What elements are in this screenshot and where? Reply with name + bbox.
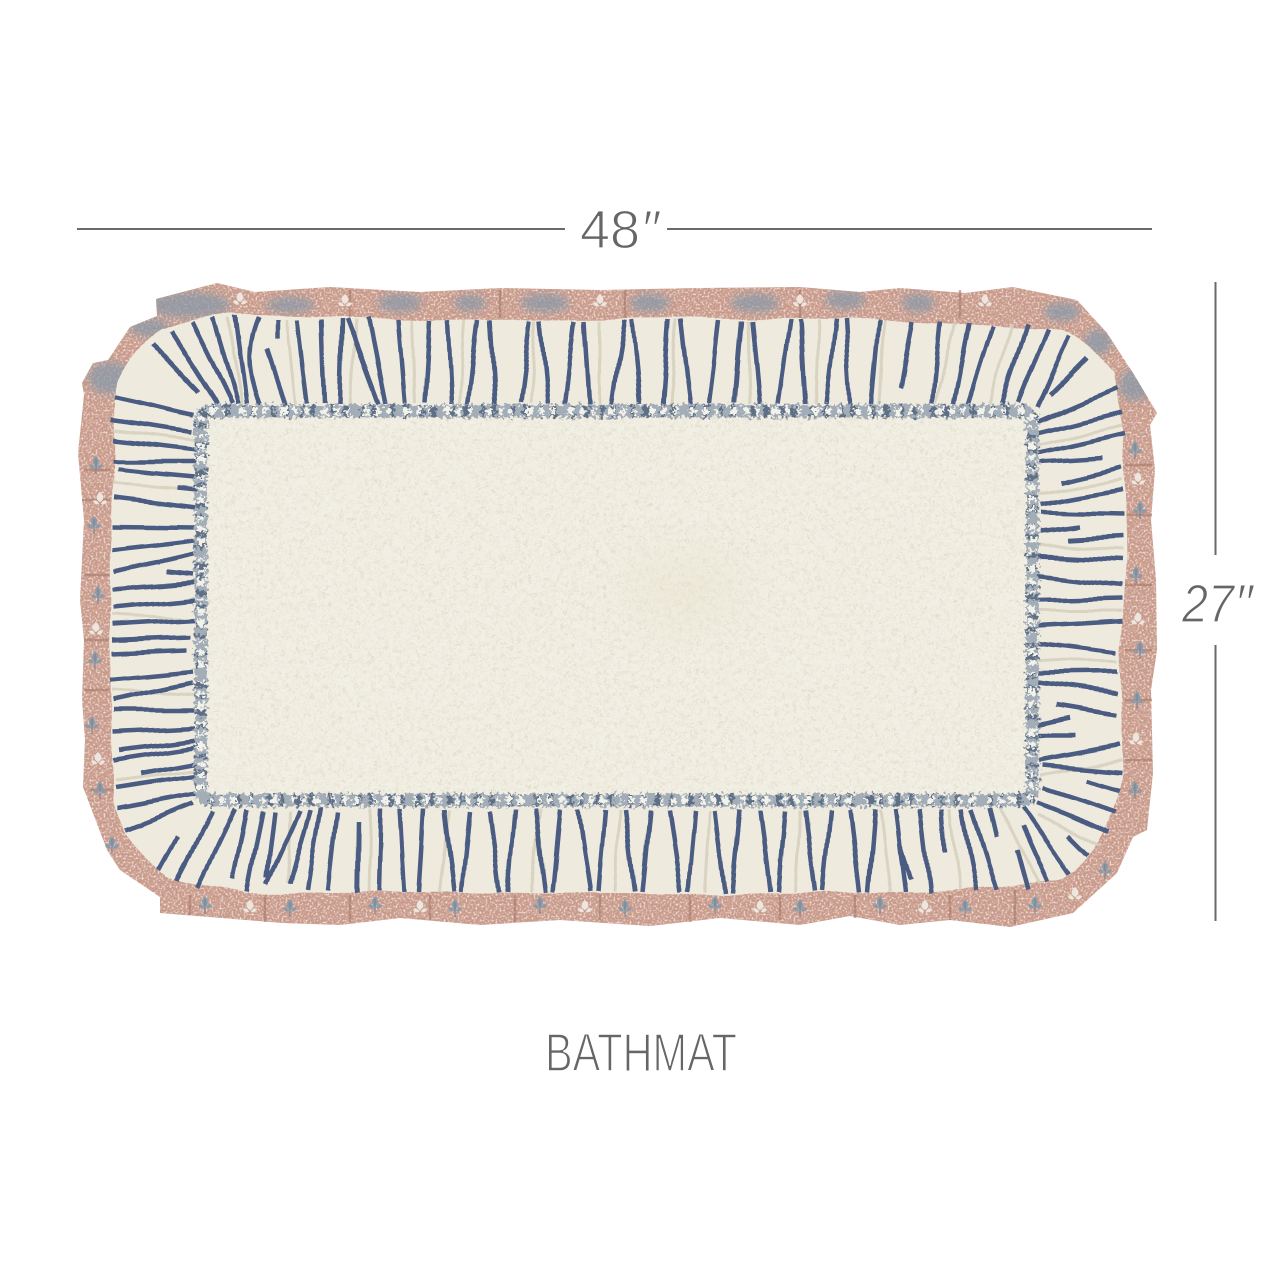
shag centre whorl	[625, 550, 745, 630]
cream shag centre	[207, 418, 1026, 794]
navy stripes: bottom edge	[160, 807, 1070, 893]
navy stripes: left edge	[110, 397, 198, 830]
blue-grey floral patches	[88, 291, 1151, 401]
height dimension: 27 inches: 27	[1181, 574, 1236, 634]
width dimension: 48 inches: 48	[580, 200, 640, 260]
cream striped ruffle	[110, 314, 1126, 894]
width dimension: 48 inches	[77, 200, 1152, 260]
width dimension: 48 inches: ″	[640, 200, 661, 260]
floral leaves	[85, 292, 1147, 917]
mottled blue-grey shag edging	[201, 411, 1032, 800]
height dimension: 27 inches: ″	[1234, 574, 1255, 634]
navy stripes: right edge	[1037, 388, 1125, 855]
ruffle fold shading	[112, 318, 1122, 892]
navy stripes: top edge	[153, 316, 1088, 408]
height dimension: 27 inches	[1181, 282, 1255, 921]
product label: BATHMAT	[545, 1023, 737, 1083]
bathmat product	[78, 283, 1157, 927]
pink fold shadows	[82, 290, 1152, 925]
outer floral pink ruffle	[78, 283, 1157, 927]
